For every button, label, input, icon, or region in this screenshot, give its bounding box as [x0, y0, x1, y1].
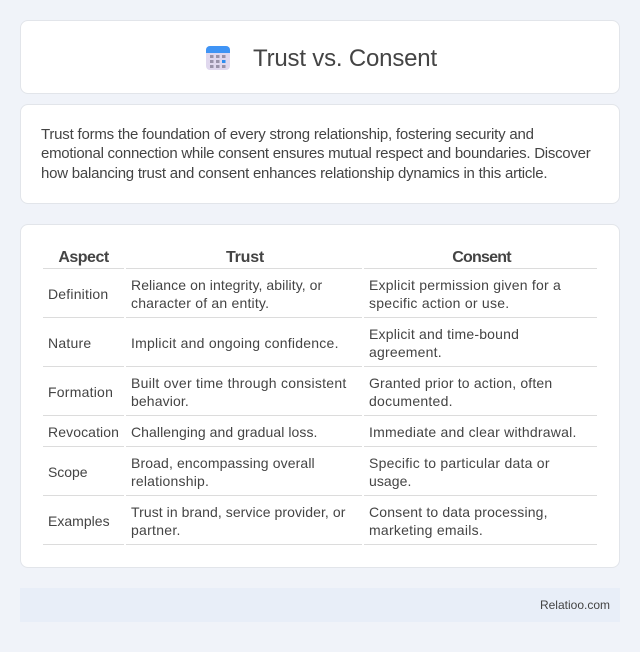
row: Scope: [43, 455, 597, 496]
row: Nature: Explicit and time-bound: [369, 326, 519, 342]
row: Definition: character of an entity.: [131, 295, 269, 311]
row: Revocation: Immediate and clear withdrawal.: [369, 424, 577, 440]
table header: Consent: [452, 249, 511, 266]
row: Formation: documented.: [369, 393, 453, 409]
row: Definition: Definition: [48, 286, 108, 302]
row: Examples: [43, 504, 597, 545]
row: Scope: Scope: [48, 464, 87, 480]
row: Definition: Explicit permission given for a: [369, 277, 561, 293]
panel: comparison table: [20, 224, 620, 568]
intro text: [41, 126, 590, 182]
row: Examples: Consent to data processing,: [369, 504, 548, 520]
row: Definition: specific action or use.: [369, 295, 509, 311]
row: Nature: [43, 326, 597, 367]
row: Formation: [43, 375, 597, 416]
footer bar: [20, 588, 620, 622]
row: Scope: Broad, encompassing overall: [131, 455, 315, 471]
row: Formation: Formation: [48, 384, 113, 400]
row: Formation: Built over time through consistent: [131, 375, 346, 391]
row: Examples: partner.: [131, 522, 181, 538]
row: Nature: agreement.: [369, 344, 442, 360]
row: Examples: Examples: [48, 513, 110, 529]
row: Revocation: Challenging and gradual loss.: [131, 424, 318, 440]
row: Examples: Trust in brand, service provider, or: [131, 504, 345, 520]
panel: title card: [20, 20, 620, 94]
intro text: how balancing trust and consent enhances relationship dynamics in this article.: [41, 165, 547, 182]
row: Formation: behavior.: [131, 393, 189, 409]
row: Revocation: [43, 424, 597, 447]
intro text: Trust forms the foundation of every strong relationship, fostering security and: [41, 126, 534, 143]
table header: [43, 249, 597, 269]
row: Examples: marketing emails.: [369, 522, 483, 538]
table header: Trust: [226, 249, 264, 266]
row: Definition: [43, 277, 597, 318]
intro text: emotional connection while consent ensures mutual respect and boundaries. Discover: [41, 145, 590, 162]
row: Nature: Nature: [48, 335, 91, 351]
table header: Aspect: [58, 249, 109, 266]
row: Nature: Implicit and ongoing confidence.: [131, 335, 339, 351]
row: Definition: Reliance on integrity, ability, or: [131, 277, 322, 293]
title: Trust vs. Consent: [253, 45, 437, 72]
row: Scope: Specific to particular data or: [369, 455, 550, 471]
panel: introduction: [20, 104, 620, 204]
row: Scope: relationship.: [131, 473, 209, 489]
row: Formation: Granted prior to action, often: [369, 375, 552, 391]
row: Revocation: Revocation: [48, 424, 119, 440]
footer text: Relatioo.com: [540, 598, 610, 612]
icon: calendar: [206, 46, 230, 70]
row: Scope: usage.: [369, 473, 411, 489]
